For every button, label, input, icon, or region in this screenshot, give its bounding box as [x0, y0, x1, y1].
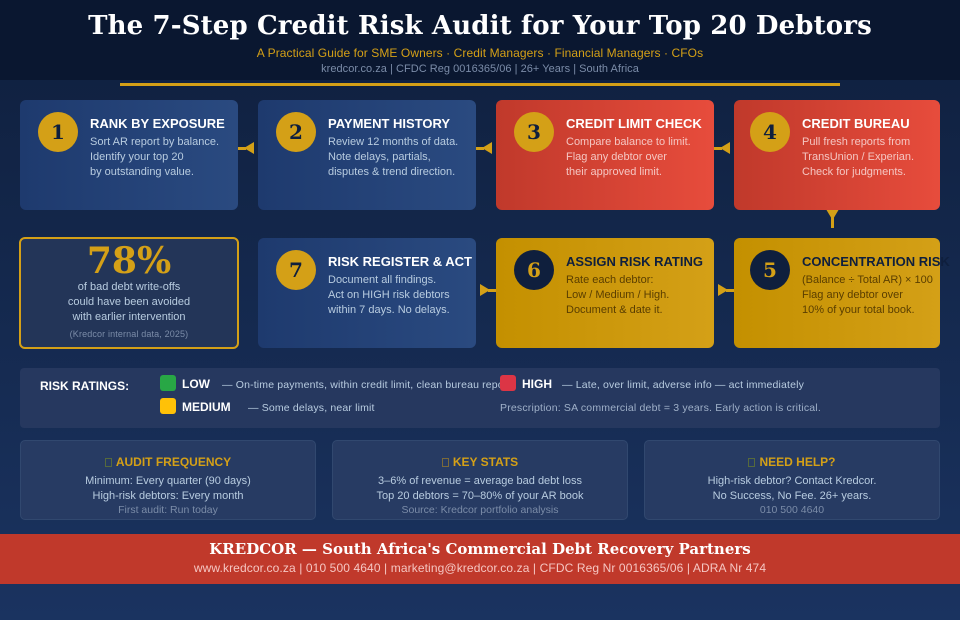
panel: need help [644, 440, 940, 520]
step 4 text: Pull fresh reports from [802, 136, 910, 148]
panel: key stats [332, 440, 628, 520]
step 6 card [496, 238, 714, 348]
stat text: could have been avoided [68, 296, 190, 308]
step 7 number [276, 250, 316, 290]
step 1 card [20, 100, 238, 210]
step 2 card [258, 100, 476, 210]
stat text [68, 281, 190, 323]
stat text: with earlier intervention [72, 311, 186, 323]
gold divider [120, 83, 840, 86]
low swatch [160, 375, 176, 391]
prescription note: Prescription: SA commercial debt = 3 years. Early action is critical. [500, 402, 821, 414]
step 7 text: Document all findings. [328, 274, 436, 286]
stats heading: KEY STATS [453, 455, 518, 469]
help line 2: No Success, No Fee. 26+ years. [713, 490, 871, 502]
step 2 text [328, 136, 458, 178]
arrow 4 to 5 [826, 210, 838, 228]
step 7 number: 7 [289, 258, 303, 282]
low label: LOW [182, 377, 210, 391]
step 7 text: within 7 days. No delays. [328, 304, 450, 316]
step 4 card [734, 100, 940, 210]
step 3 text: Flag any debtor over [566, 151, 667, 163]
step 4 title: CREDIT BUREAU [802, 116, 910, 131]
panel: audit frequency [20, 440, 316, 520]
stat callout: 78% [19, 237, 239, 349]
medium label: MEDIUM [182, 400, 231, 414]
audit heading: AUDIT FREQUENCY [116, 455, 231, 469]
footer contacts: www.kredcor.co.za | 010 500 4640 | marketing@kredcor.co.za | CFDC Reg Nr 0016365/06 | ADRA Nr 474 [194, 561, 766, 575]
step 3 number: 3 [527, 120, 541, 144]
step 7 text: Act on HIGH risk debtors [328, 289, 450, 301]
step 7 card [258, 238, 476, 348]
step 7 title: RISK REGISTER & ACT [328, 254, 472, 269]
arrow 2 to 1 [238, 142, 254, 154]
step 6 text: Rate each debtor: [566, 274, 653, 286]
medium swatch [160, 398, 176, 414]
step 6 text: Document & date it. [566, 304, 663, 316]
step 3 text [566, 136, 691, 178]
step 6 title: ASSIGN RISK RATING [566, 254, 703, 269]
step 1 text: Sort AR report by balance. [90, 136, 219, 148]
audit note: First audit: Run today [118, 504, 218, 516]
low text: — On-time payments, within credit limit, clean bureau report [222, 379, 511, 391]
step 5 text [802, 274, 933, 316]
step 3 text: their approved limit. [566, 166, 662, 178]
arrow 5 to 6 [718, 284, 734, 296]
stats note: Source: Kredcor portfolio analysis [402, 504, 558, 516]
step 2 text: disputes & trend direction. [328, 166, 455, 178]
medium text: — Some delays, near limit [248, 402, 375, 414]
legend heading: RISK RATINGS: [40, 379, 129, 393]
help note: 010 500 4640 [760, 504, 824, 516]
stat text: of bad debt write-offs [78, 281, 180, 293]
step 4 text [802, 136, 914, 178]
step 1 text: by outstanding value. [90, 166, 194, 178]
step 3 text: Compare balance to limit. [566, 136, 691, 148]
stats line 2: Top 20 debtors = 70–80% of your AR book [376, 490, 584, 502]
step 6 number [514, 250, 554, 290]
step 5 title: CONCENTRATION RISK [802, 254, 950, 269]
help heading: NEED HELP? [759, 455, 836, 469]
step 1 number: 1 [51, 120, 65, 144]
step 2 title: PAYMENT HISTORY [328, 116, 450, 131]
help line 1: High-risk debtor? Contact Kredcor. [708, 475, 876, 487]
high text: — Late, over limit, adverse info — act immediately [562, 379, 804, 391]
footer band [0, 534, 960, 584]
header band [0, 0, 960, 80]
stats line 1: 3–6% of revenue = average bad debt loss [378, 475, 582, 487]
step 5 text: 10% of your total book. [802, 304, 915, 316]
step 7 text [328, 274, 450, 316]
step 3 card [496, 100, 714, 210]
step 1 text [90, 136, 219, 178]
high swatch [500, 375, 516, 391]
risk ratings legend [20, 368, 940, 428]
step 4 text: Check for judgments. [802, 166, 906, 178]
step 2 number [276, 112, 316, 152]
step 6 text: Low / Medium / High. [566, 289, 669, 301]
arrow 6 to 7 [480, 284, 496, 296]
stat source: (Kredcor internal data, 2025) [70, 329, 188, 339]
step 1 text: Identify your top 20 [90, 151, 184, 163]
step 5 text: Flag any debtor over [802, 289, 903, 301]
step 4 number: 4 [763, 120, 777, 144]
step 4 number [750, 112, 790, 152]
step 2 text: Note delays, partials, [328, 151, 431, 163]
step 6 number: 6 [527, 258, 541, 282]
footer title: KREDCOR — South Africa's Commercial Debt Recovery Partners [209, 540, 751, 558]
arrow 3 to 2 [476, 142, 492, 154]
high label: HIGH [522, 377, 552, 391]
step 3 number [514, 112, 554, 152]
step 5 number: 5 [763, 258, 777, 282]
step 1 title: RANK BY EXPOSURE [90, 116, 225, 131]
step 2 text: Review 12 months of data. [328, 136, 458, 148]
audit line 2: High-risk debtors: Every month [92, 490, 244, 502]
step 1 number [38, 112, 78, 152]
stat value: 78% [87, 240, 171, 282]
step 5 card [734, 238, 940, 348]
registration line: kredcor.co.za | CFDC Reg 0016365/06 | 26+ Years | South Africa [321, 63, 639, 75]
subtitle: A Practical Guide for SME Owners · Credit Managers · Financial Managers · CFOs [257, 46, 703, 60]
step 6 text [566, 274, 669, 316]
step 2 number: 2 [289, 120, 303, 144]
audit line 1: Minimum: Every quarter (90 days) [85, 475, 251, 487]
arrow 4 to 3 [714, 142, 730, 154]
title: The 7-Step Credit Risk Audit for Your Top 20 Debtors [88, 11, 872, 41]
step 5 number [750, 250, 790, 290]
step 5 text: (Balance ÷ Total AR) × 100 [802, 274, 933, 286]
step 3 title: CREDIT LIMIT CHECK [566, 116, 702, 131]
step 4 text: TransUnion / Experian. [802, 151, 914, 163]
